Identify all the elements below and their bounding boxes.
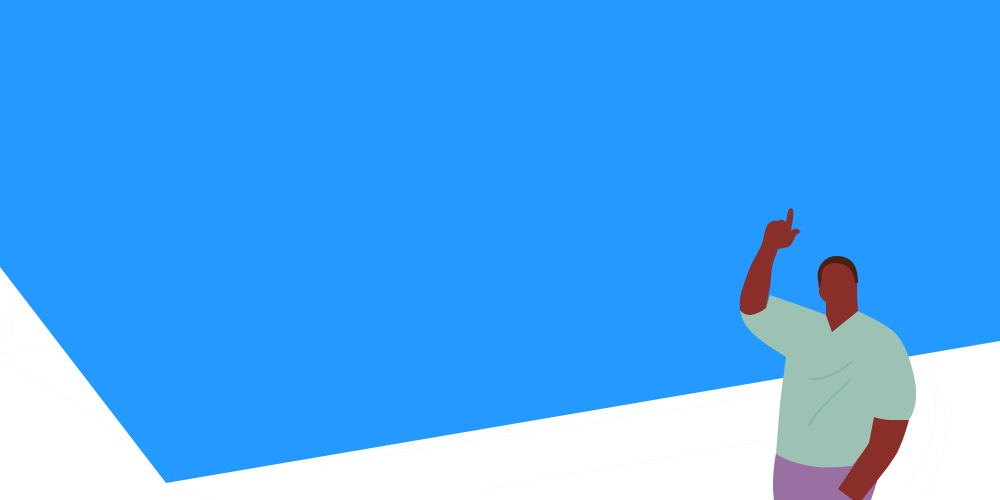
person [740,208,916,500]
shirt creases [809,362,851,425]
trousers [773,450,880,500]
raised arm and pointing hand [740,208,801,315]
hair [818,256,858,288]
shirt [740,295,916,467]
head and neck [819,262,858,332]
lowered forearm [838,417,909,500]
